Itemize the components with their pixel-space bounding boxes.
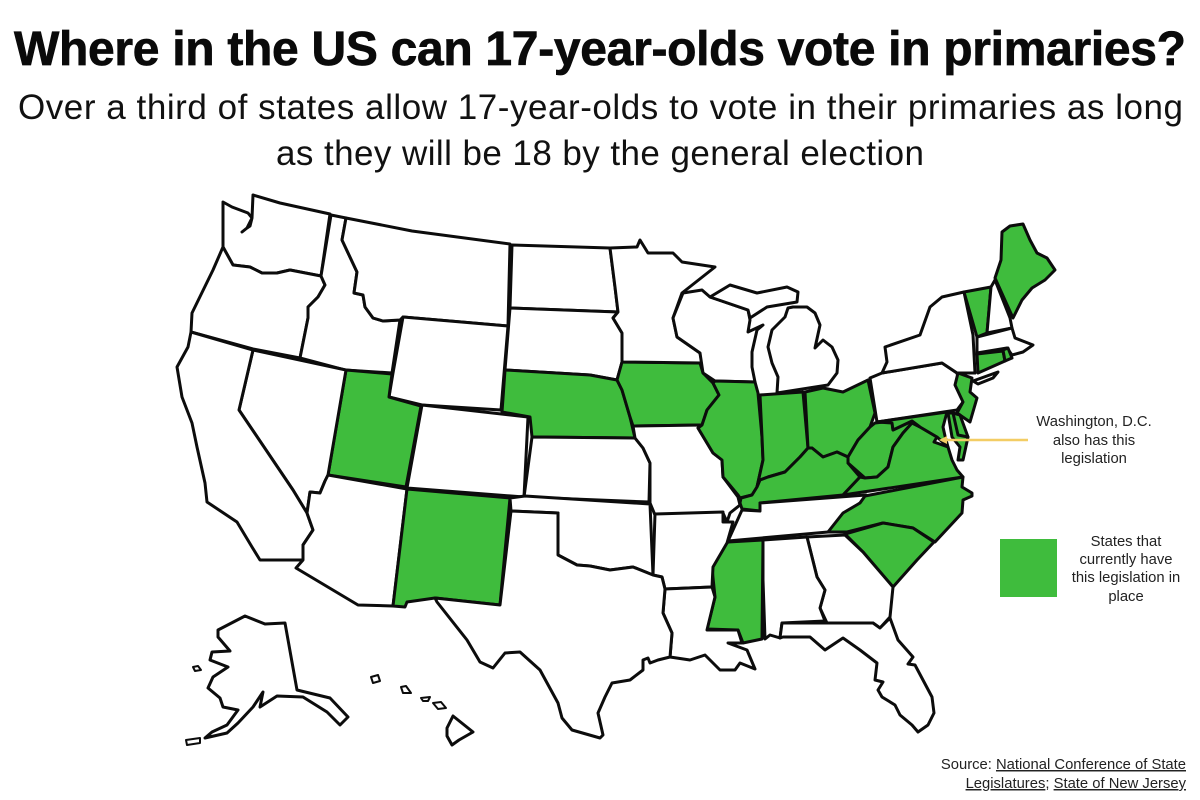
Washington, D.C. callout: Washington, D.C.: [1036, 414, 1152, 430]
state: Georgia: [807, 535, 893, 628]
state: North Carolina: [828, 477, 972, 542]
state: New York: [882, 292, 975, 373]
state: Rhode Island: [1003, 348, 1012, 361]
state: Long Island: [973, 372, 998, 384]
state: Washington: [223, 195, 330, 276]
state: Idaho: [300, 215, 400, 373]
subtitle: as they will be 18 by the general election: [276, 134, 924, 173]
state: Texas: [435, 511, 672, 738]
state: Indiana: [757, 392, 808, 487]
state: North Dakota: [510, 245, 618, 312]
state: Oklahoma: [510, 496, 653, 575]
Hawaiian islands: [371, 675, 473, 745]
state: Wyoming: [389, 317, 508, 410]
subtitle: [18, 88, 1183, 173]
state: South Carolina: [845, 523, 934, 587]
state: Pennsylvania: [870, 363, 963, 422]
source note: Source: National Conference of State: [941, 757, 1186, 773]
state: Ohio: [805, 380, 875, 457]
legend text: States that: [1091, 534, 1161, 550]
Washington, D.C. callout: legislation: [1061, 451, 1127, 467]
state: Nebraska: [502, 370, 635, 438]
legend text: currently have: [1080, 552, 1172, 568]
state: Michigan lower peninsula: [768, 307, 838, 393]
state: Vermont: [964, 287, 991, 337]
state: Tennessee: [728, 495, 866, 541]
state: New Jersey: [955, 373, 977, 422]
state: Maryland eastern shore: [948, 413, 968, 460]
state: Wisconsin: [673, 290, 763, 382]
state: South Dakota: [505, 308, 622, 380]
Washington, D.C. callout: also has this: [1053, 433, 1135, 449]
state: Connecticut: [977, 351, 1005, 373]
state: Delaware: [953, 413, 968, 437]
state: West Virginia: [848, 421, 920, 478]
legend text: this legislation in: [1072, 570, 1180, 586]
state: California: [177, 332, 313, 560]
state: Maine: [995, 224, 1055, 318]
arrow to Washington, D.C.: [939, 436, 1028, 444]
state: Alaska: [205, 616, 348, 738]
state: Minnesota: [610, 240, 715, 363]
state: Montana: [342, 218, 510, 326]
state: Oregon: [191, 247, 325, 358]
Washington, D.C. callout: [1036, 414, 1152, 467]
state: Arizona: [296, 475, 407, 606]
state: Kansas: [524, 437, 650, 502]
source note: [941, 757, 1187, 792]
state: Arkansas: [653, 512, 733, 589]
Alaskan islands: [186, 666, 201, 745]
state: Illinois: [698, 381, 763, 498]
legend text: place: [1108, 589, 1144, 605]
state: Utah: [328, 370, 421, 487]
legend text: [1072, 534, 1180, 605]
legend swatch: [1000, 539, 1057, 597]
state: Kentucky: [740, 448, 860, 511]
state: New Hampshire: [987, 280, 1012, 333]
state: Louisiana: [663, 587, 755, 670]
state: Alabama: [763, 537, 825, 639]
state: Maryland: [877, 412, 948, 447]
state: Virginia: [843, 423, 963, 495]
title: Where in the US can 17-year-olds vote in primaries?: [14, 23, 1186, 76]
state: Colorado: [407, 405, 528, 497]
state: Mississippi: [707, 540, 763, 643]
state: Massachusetts: [977, 328, 1033, 355]
state: Missouri: [633, 425, 740, 522]
map of the United States: [177, 195, 1055, 745]
subtitle: Over a third of states allow 17-year-olds to vote in their primaries as long: [18, 88, 1183, 127]
source note: Legislatures; State of New Jersey: [966, 776, 1187, 792]
state: Nevada: [239, 350, 346, 513]
state: New Mexico: [393, 489, 510, 607]
state: Florida: [780, 618, 934, 732]
state: Michigan upper peninsula: [710, 285, 798, 318]
state: Iowa: [617, 362, 719, 426]
